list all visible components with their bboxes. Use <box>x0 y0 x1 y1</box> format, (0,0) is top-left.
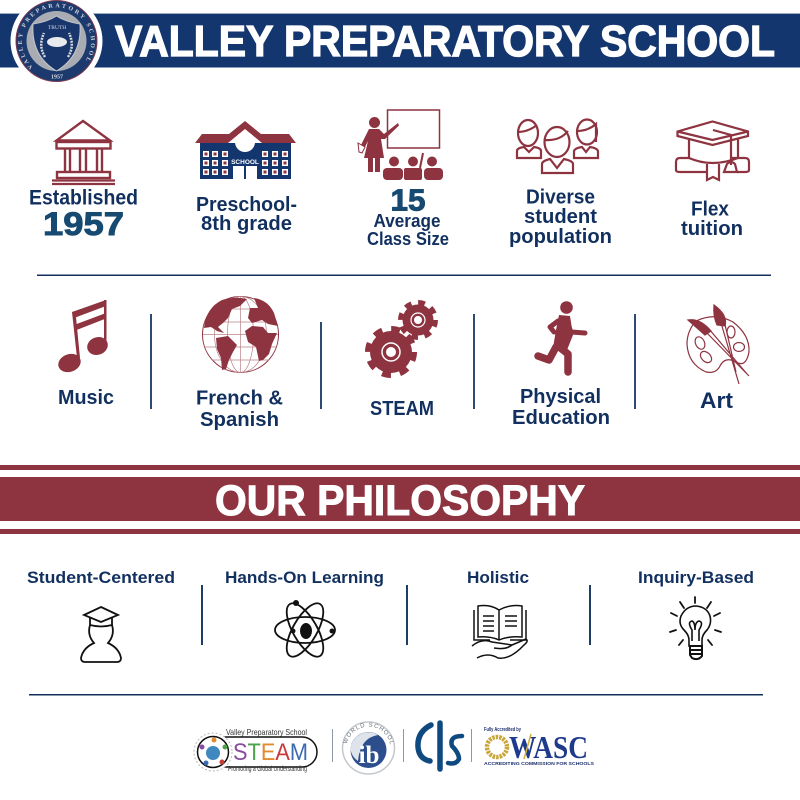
text: hands-on learning: Hands-On Learning <box>225 568 384 587</box>
text: french and spanish: Spanish <box>200 409 279 431</box>
icon: school seal <box>10 0 102 82</box>
text: diverse student population: student <box>524 206 597 228</box>
icon: art palette <box>687 305 749 384</box>
icon: student with cap <box>81 607 121 662</box>
logo: ib world school <box>342 721 396 775</box>
philosophy banner <box>0 465 800 534</box>
icon: school seal: 1957 <box>51 74 63 80</box>
text: diverse student population <box>509 186 612 248</box>
icon: music notes <box>56 300 110 375</box>
text: physical education: Education <box>512 407 610 429</box>
logo: wasc <box>484 727 594 766</box>
text: french and spanish: French & <box>196 388 283 410</box>
text: physical education <box>512 386 610 429</box>
text: physical education: Physical <box>520 386 601 408</box>
logo: cais <box>418 723 462 769</box>
header banner <box>0 13 800 68</box>
icon: classroom teacher <box>358 110 443 180</box>
panel: philosophy items <box>27 568 754 662</box>
icon: school seal: TRUTH <box>48 25 66 31</box>
icon: gears <box>369 304 434 374</box>
text: established: 1957 <box>43 206 124 242</box>
logo: wasc: WASC <box>509 729 588 765</box>
text: holistic: Holistic <box>467 568 529 587</box>
logo: ib world school: WORLD SCHOOL <box>343 722 394 744</box>
text: art: Art <box>700 388 734 413</box>
icon: school seal: VALLEY PREPARATORY SCHOOL <box>18 3 95 70</box>
icon: globe <box>202 296 278 372</box>
text: diverse student population: Diverse <box>526 186 595 208</box>
text: flex tuition: tuition <box>681 218 743 240</box>
text: class size <box>367 182 449 249</box>
text: established: Established <box>29 186 138 210</box>
heading: our philosophy: OUR PHILOSOPHY <box>215 477 585 525</box>
icon: school building <box>195 121 296 179</box>
logo: steam: STEAM <box>233 739 308 766</box>
text: steam: STEAM <box>370 398 434 420</box>
text: established <box>29 186 138 242</box>
icon: book on hand <box>472 606 527 658</box>
text: inquiry-based: Inquiry-Based <box>638 568 754 587</box>
icon: running figure <box>538 301 585 372</box>
logo: steam <box>194 727 317 773</box>
icon: atom <box>275 598 335 662</box>
logo: steam: Promoting a Global Understanding <box>228 764 307 773</box>
logo: steam: Valley Preparatory School <box>226 727 307 737</box>
icon: three students <box>517 120 598 173</box>
icon: institution building <box>52 121 115 184</box>
logo: ib world school: ib <box>359 742 379 769</box>
icon: light bulb <box>670 597 721 659</box>
text: preschool: Preschool- <box>196 194 297 216</box>
icon: graduation cap and diploma <box>676 122 749 180</box>
logo: wasc: Fully Accredited by <box>484 727 521 733</box>
icon: school building: SCHOOL <box>231 159 259 166</box>
text: music: Music <box>58 387 114 409</box>
text: flex tuition: Flex <box>691 198 729 220</box>
text: student-centered: Student-Centered <box>27 568 175 587</box>
text: preschool <box>196 194 297 235</box>
panel: accreditation logos <box>194 720 594 775</box>
text: class size: Average <box>374 211 440 231</box>
logo: wasc: ACCREDITING COMMISSION FOR SCHOOLS <box>484 761 594 766</box>
text: preschool: 8th grade <box>201 213 292 235</box>
text: diverse student population: population <box>509 226 612 248</box>
text: class size: 15 <box>390 182 426 218</box>
text: class size: Class Size <box>367 229 449 249</box>
panel: programs <box>56 296 749 431</box>
panel: school facts <box>29 110 749 249</box>
text: flex tuition <box>681 198 743 240</box>
text: french and spanish <box>196 388 283 431</box>
